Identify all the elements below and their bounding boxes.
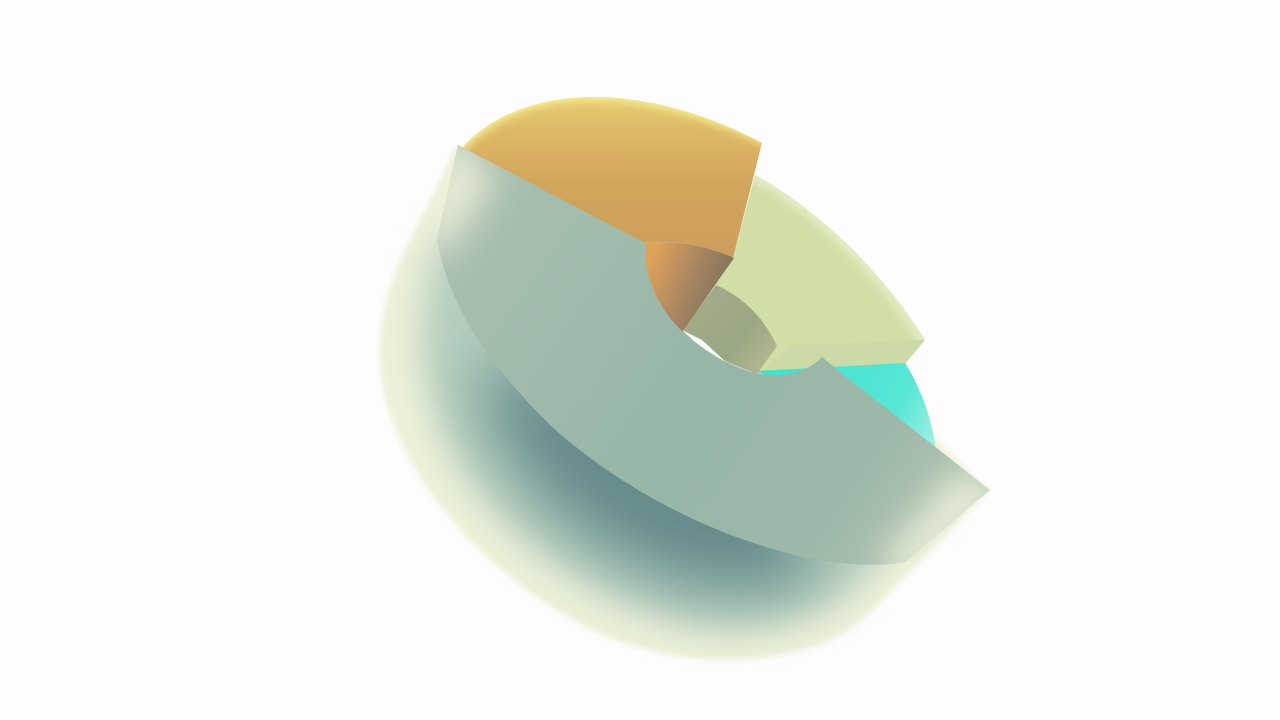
hole: white gap	[682, 330, 728, 364]
top face edge fades	[437, 145, 990, 564]
slice: light green top face	[716, 175, 925, 372]
3D donut chart	[378, 97, 990, 662]
donut outer wall glow	[380, 146, 988, 660]
slice seam: green to cyan	[760, 340, 925, 372]
green face outer edge fade	[755, 175, 925, 340]
donut outer wall shading	[480, 360, 825, 591]
donut outer wall mid tone	[422, 235, 935, 630]
slice: blue-grey top face	[437, 145, 990, 565]
slice: orange top face	[460, 97, 762, 258]
slice: cyan side	[757, 363, 936, 470]
hole: green inner wall	[682, 285, 777, 374]
orange outer edge fade	[462, 97, 762, 151]
hole: orange inner wall	[645, 242, 734, 332]
